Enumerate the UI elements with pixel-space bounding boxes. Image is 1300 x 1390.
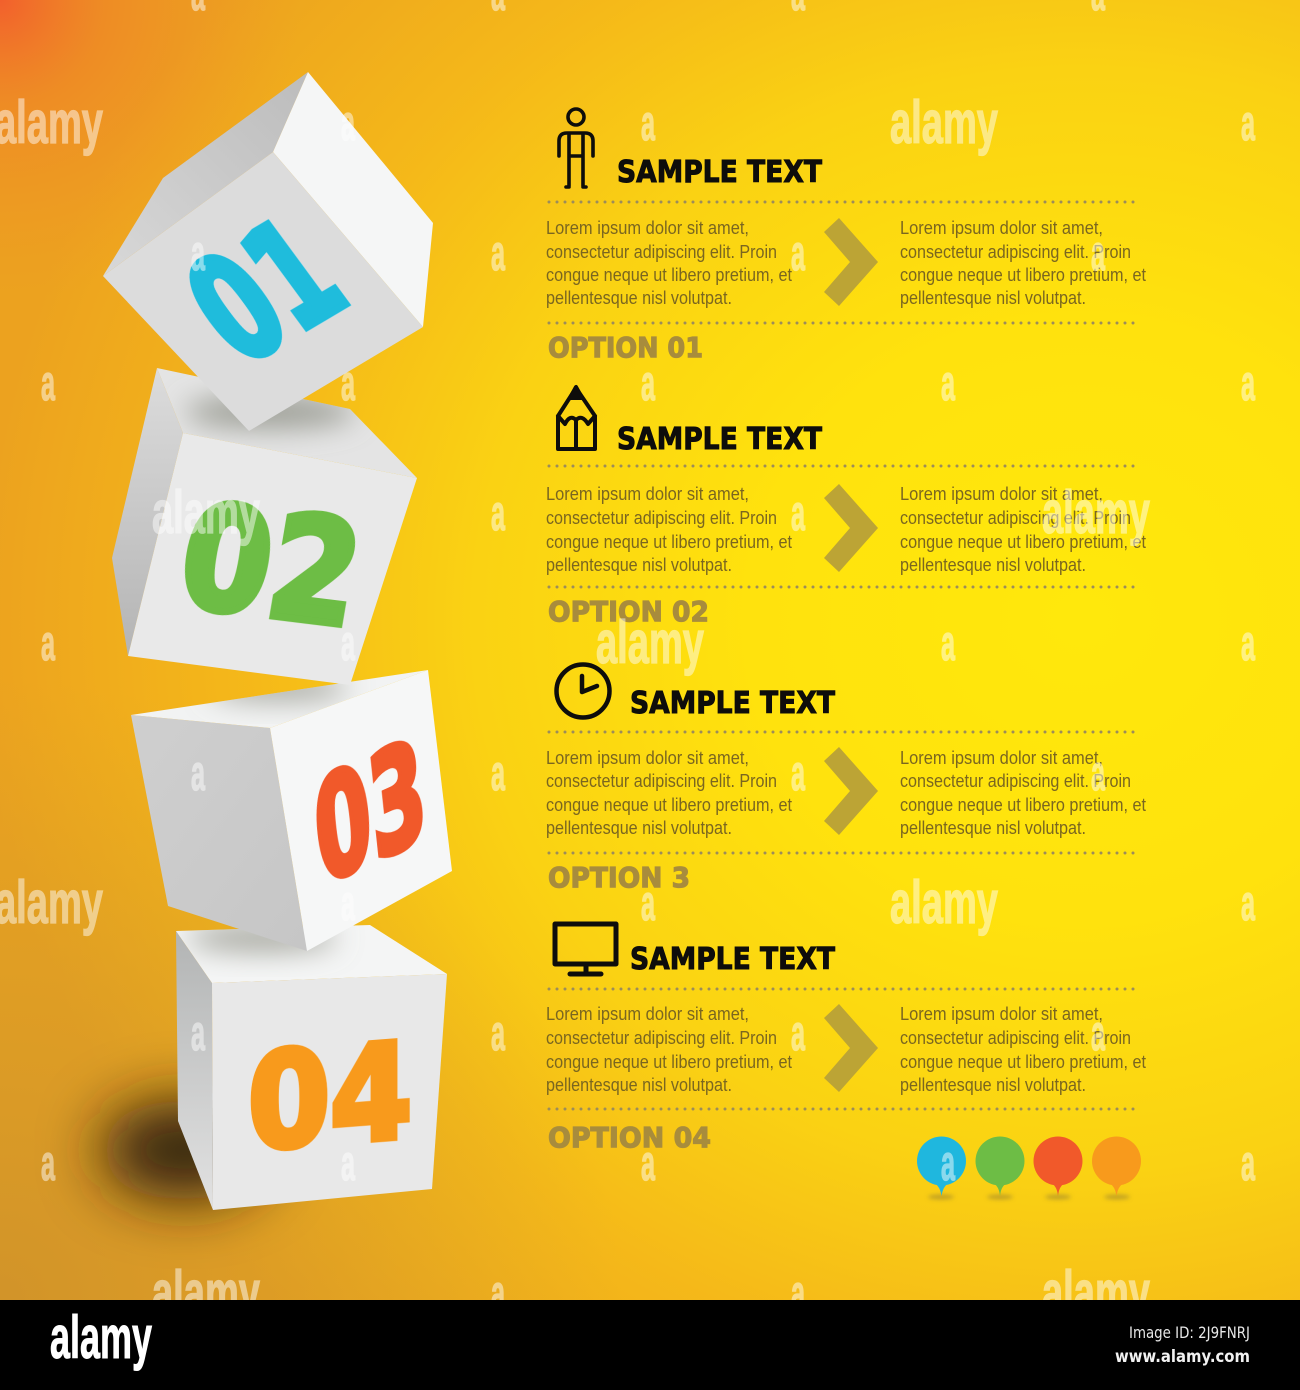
stock watermarks: alamy — [596, 609, 704, 676]
text column right: consectetur adipiscing elit. Proin — [900, 242, 1131, 262]
colour pin legend — [917, 1136, 1141, 1200]
text column left: congue neque ut libero pretium, et — [546, 532, 792, 552]
stock watermarks: alamy — [152, 479, 260, 546]
text column right: consectetur adipiscing elit. Proin — [900, 1028, 1131, 1048]
stock watermarks: alamy — [890, 869, 998, 936]
stock watermarks: a — [791, 1005, 806, 1061]
stock watermarks: a — [491, 485, 506, 541]
stock watermarks: a — [341, 875, 356, 931]
icon: pencil — [558, 387, 595, 449]
text column right: Lorem ipsum dolor sit amet, — [900, 1004, 1103, 1024]
stock watermarks: a — [491, 1005, 506, 1061]
pin: blue — [917, 1136, 966, 1200]
stock watermarks: a — [641, 355, 656, 411]
black footer bar — [0, 1300, 1300, 1390]
stock watermarks: a — [191, 1005, 206, 1061]
stock watermarks: a — [1241, 355, 1256, 411]
text column left: Lorem ipsum dolor sit amet, — [546, 218, 749, 238]
stock watermarks: a — [791, 745, 806, 801]
arrow — [824, 747, 878, 835]
stock watermarks: a — [641, 875, 656, 931]
stock watermarks: a — [491, 1265, 506, 1321]
website: www.alamy.com — [1115, 1347, 1250, 1367]
text column right: pellentesque nisl volutpat. — [900, 1075, 1086, 1095]
text column left: Lorem ipsum dolor sit amet, — [546, 748, 749, 768]
heading: SAMPLE TEXT — [617, 422, 822, 457]
stock watermarks: a — [1091, 225, 1106, 281]
cube 03 — [131, 670, 452, 951]
stock watermarks: alamy — [1042, 1259, 1150, 1326]
icon: monitor — [555, 924, 616, 974]
text column right: congue neque ut libero pretium, et — [900, 265, 1146, 285]
pin: green — [976, 1136, 1024, 1200]
option 04 block — [546, 924, 1146, 1154]
text column right: Lorem ipsum dolor sit amet, — [900, 218, 1103, 238]
option label: OPTION 01 — [548, 331, 703, 364]
option label: OPTION 02 — [548, 595, 709, 628]
number 04: 04 — [248, 1014, 412, 1181]
stock watermarks: alamy — [0, 869, 103, 936]
stock watermarks: a — [1091, 1005, 1106, 1061]
option label: OPTION 3 — [548, 861, 690, 894]
stock watermarks: a — [791, 225, 806, 281]
text column left — [546, 748, 792, 838]
stock watermarks: a — [1241, 95, 1256, 151]
stock watermarks: a — [791, 485, 806, 541]
stock watermarks: a — [1241, 875, 1256, 931]
cube 01 — [103, 72, 433, 431]
heading: SAMPLE TEXT — [630, 686, 835, 721]
text column right: congue neque ut libero pretium, et — [900, 532, 1146, 552]
text column left: pellentesque nisl volutpat. — [546, 818, 732, 838]
stock watermarks: a — [41, 615, 56, 671]
image id: Image ID: 2J9FNRJ — [1129, 1323, 1250, 1342]
number 03: 03 — [308, 710, 433, 917]
stock watermarks: a — [341, 95, 356, 151]
text column left — [546, 218, 792, 308]
option 01 block — [546, 109, 1146, 364]
arrow — [824, 218, 878, 306]
stock watermarks: a — [341, 615, 356, 671]
text column right: Lorem ipsum dolor sit amet, — [900, 748, 1103, 768]
text column right: consectetur adipiscing elit. Proin — [900, 771, 1131, 791]
stock watermarks: a — [491, 225, 506, 281]
text column left: pellentesque nisl volutpat. — [546, 288, 732, 308]
arrow — [824, 484, 878, 572]
text column left: congue neque ut libero pretium, et — [546, 795, 792, 815]
stock watermarks: a — [941, 355, 956, 411]
text column right — [900, 1004, 1146, 1095]
arrow — [824, 1004, 878, 1092]
text column right: congue neque ut libero pretium, et — [900, 795, 1146, 815]
text column right — [900, 218, 1146, 308]
text column left: pellentesque nisl volutpat. — [546, 1075, 732, 1095]
pin: orange — [1092, 1136, 1141, 1200]
number 01: 01 — [158, 188, 374, 396]
option 03 block — [546, 664, 1146, 894]
cube 04 — [176, 925, 447, 1210]
stock watermarks: alamy — [1042, 479, 1150, 546]
stock watermarks: a — [41, 1135, 56, 1191]
text column right: pellentesque nisl volutpat. — [900, 555, 1086, 575]
stock watermarks: a — [641, 1135, 656, 1191]
stock watermarks: a — [491, 745, 506, 801]
text column right: pellentesque nisl volutpat. — [900, 818, 1086, 838]
footer logo: alamy — [50, 1304, 152, 1371]
text column left: pellentesque nisl volutpat. — [546, 555, 732, 575]
icon: clock — [556, 664, 610, 718]
cube 02 — [112, 368, 417, 685]
option label: OPTION 04 — [548, 1121, 711, 1154]
stock watermarks: a — [341, 1135, 356, 1191]
text column left: congue neque ut libero pretium, et — [546, 265, 792, 285]
text column right: Lorem ipsum dolor sit amet, — [900, 484, 1103, 504]
heading: SAMPLE TEXT — [630, 942, 835, 977]
stock watermarks: a — [191, 225, 206, 281]
stock watermarks: a — [341, 355, 356, 411]
stock watermarks: a — [191, 745, 206, 801]
stock watermarks: alamy — [890, 89, 998, 156]
pin: red — [1034, 1136, 1082, 1200]
stock watermarks: a — [791, 1265, 806, 1321]
stock watermarks: a — [1091, 745, 1106, 801]
stock watermarks: a — [941, 615, 956, 671]
stock watermarks: alamy — [152, 1259, 260, 1326]
text column left: consectetur adipiscing elit. Proin — [546, 1028, 777, 1048]
text column left: Lorem ipsum dolor sit amet, — [546, 484, 749, 504]
cube ground shadow — [100, 1100, 270, 1200]
text column right: pellentesque nisl volutpat. — [900, 288, 1086, 308]
text column left — [546, 484, 792, 575]
stock watermarks: a — [941, 1135, 956, 1191]
text column right: congue neque ut libero pretium, et — [900, 1052, 1146, 1072]
stock watermarks: a — [1241, 1135, 1256, 1191]
text column left: congue neque ut libero pretium, et — [546, 1052, 792, 1072]
text column left: consectetur adipiscing elit. Proin — [546, 242, 777, 262]
text column right — [900, 484, 1146, 575]
icon: person — [559, 109, 593, 187]
number 02: 02 — [169, 473, 372, 660]
heading: SAMPLE TEXT — [617, 155, 822, 190]
text column left — [546, 1004, 792, 1095]
text column right — [900, 748, 1146, 838]
text column right: consectetur adipiscing elit. Proin — [900, 508, 1131, 528]
stock watermarks: a — [641, 95, 656, 151]
stock watermarks: alamy — [0, 89, 103, 156]
text column left: consectetur adipiscing elit. Proin — [546, 508, 777, 528]
stock watermarks: a — [41, 355, 56, 411]
option 02 block — [546, 387, 1146, 628]
text column left: consectetur adipiscing elit. Proin — [546, 771, 777, 791]
stock watermarks: a — [1241, 615, 1256, 671]
text column left: Lorem ipsum dolor sit amet, — [546, 1004, 749, 1024]
